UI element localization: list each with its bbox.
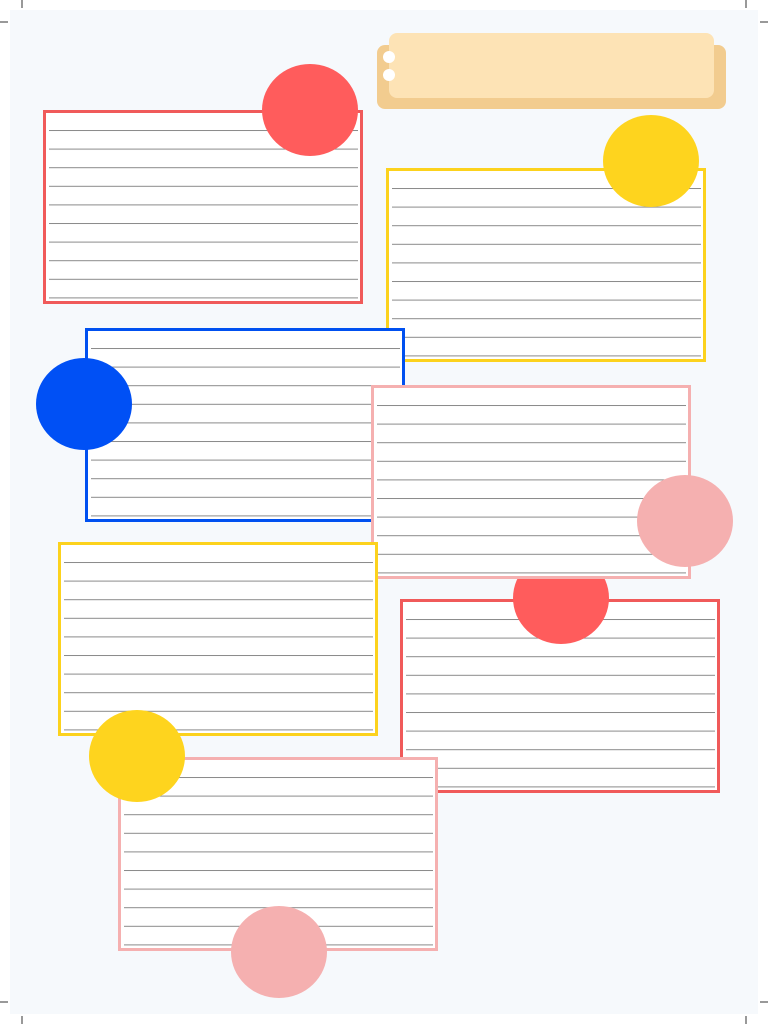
circle yellow 2 — [89, 710, 185, 802]
banner — [377, 33, 726, 109]
card 2 yellow — [388, 170, 704, 360]
card 3 blue — [86, 330, 404, 520]
circle yellow 1 — [603, 115, 699, 207]
card 5 yellow — [60, 544, 376, 734]
card 1 red — [44, 112, 362, 302]
circle blue — [36, 358, 132, 450]
circle red 1 — [262, 64, 358, 156]
circle red 2 — [513, 552, 609, 644]
circle pink 2 — [231, 906, 327, 998]
circle pink 1 — [637, 475, 733, 567]
card 4 pink — [372, 386, 690, 578]
card 7 pink — [120, 758, 436, 950]
card 6 red — [402, 600, 718, 792]
